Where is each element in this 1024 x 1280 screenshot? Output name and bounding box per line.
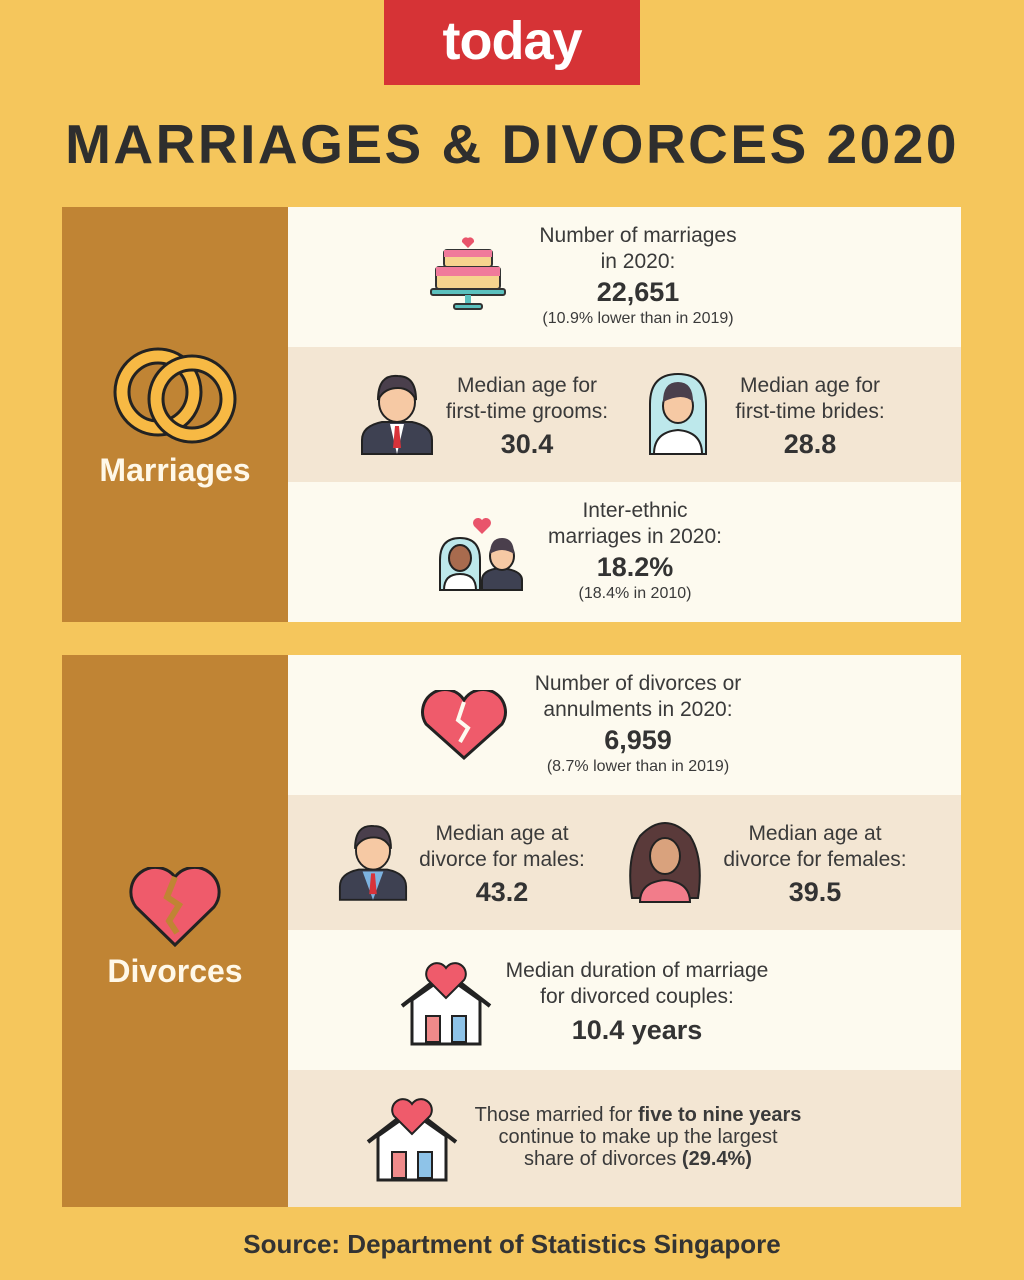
text: five to nine years: Those married for five to nine years xyxy=(475,1104,801,1126)
text: five to nine years xyxy=(475,1104,801,1170)
text: females: Median age at xyxy=(748,822,882,845)
text: females: 39.5 xyxy=(789,877,841,907)
text: brides xyxy=(735,374,885,459)
text: duration: for divorced couples: xyxy=(540,985,734,1008)
icon: bride xyxy=(649,373,707,455)
text: brides: Median age for xyxy=(740,374,880,397)
icon: broken heart small xyxy=(421,690,507,760)
logo: today xyxy=(442,11,582,71)
text: females xyxy=(723,822,907,907)
text: grooms: 30.4 xyxy=(501,429,553,459)
source: Source: Department of Statistics Singapore xyxy=(243,1229,781,1259)
text: females: divorce for females: xyxy=(723,848,907,871)
title: MARRIAGES & DIVORCES 2020 xyxy=(65,113,959,175)
text: five to nine years: share of divorces (29.4%) xyxy=(524,1148,752,1170)
text: males: Median age at xyxy=(435,822,569,845)
icon: house 2 xyxy=(366,1098,458,1182)
marriages sidebar xyxy=(62,207,288,622)
text: number of divorces: Number of divorces or xyxy=(535,672,741,695)
text: duration: Median duration of marriage xyxy=(506,959,768,982)
icon: man xyxy=(338,825,408,901)
text: duration: 10.4 years xyxy=(572,1015,702,1045)
icon: house broken heart xyxy=(400,962,492,1046)
text: inter-ethnic: marriages in 2020: xyxy=(548,525,722,548)
text: five to nine years: continue to make up the largest xyxy=(498,1126,778,1148)
text: number of divorces xyxy=(535,672,741,775)
text: inter-ethnic xyxy=(548,499,722,602)
divorces sidebar xyxy=(62,655,288,1207)
text: males: 43.2 xyxy=(476,877,528,907)
label: marriages: Marriages xyxy=(99,452,251,488)
text: inter-ethnic: (18.4% in 2010) xyxy=(579,585,691,602)
text: number of marriages: 22,651 xyxy=(597,277,679,307)
text: inter-ethnic: 18.2% xyxy=(597,552,673,582)
text: males: divorce for males: xyxy=(419,848,585,871)
text: number of marriages xyxy=(539,224,737,327)
text: number of marriages: in 2020: xyxy=(601,250,675,273)
text: brides: 28.8 xyxy=(784,429,836,459)
text: number of divorces: 6,959 xyxy=(604,725,672,755)
text: males xyxy=(419,822,585,907)
icon: woman xyxy=(629,822,701,903)
icon: cake xyxy=(430,237,506,310)
text: grooms xyxy=(446,374,608,459)
text: duration xyxy=(506,959,768,1045)
text: number of marriages: Number of marriages xyxy=(539,224,737,247)
label: divorces: Divorces xyxy=(107,953,243,989)
text: inter-ethnic: Inter-ethnic xyxy=(582,499,688,522)
text: brides: first-time brides: xyxy=(735,400,885,423)
panel: marriages xyxy=(62,207,961,622)
text: grooms: Median age for xyxy=(457,374,597,397)
text: number of marriages: (10.9% lower than in 2019) xyxy=(542,310,734,327)
icon: rings xyxy=(114,348,236,444)
icon: broken heart xyxy=(129,867,221,947)
text: grooms: first-time grooms: xyxy=(446,400,608,423)
text: number of divorces: (8.7% lower than in 2019) xyxy=(547,758,729,775)
icon: couple xyxy=(439,518,523,591)
text: number of divorces: annulments in 2020: xyxy=(543,698,733,721)
icon: groom xyxy=(361,374,433,455)
logo xyxy=(384,0,640,85)
